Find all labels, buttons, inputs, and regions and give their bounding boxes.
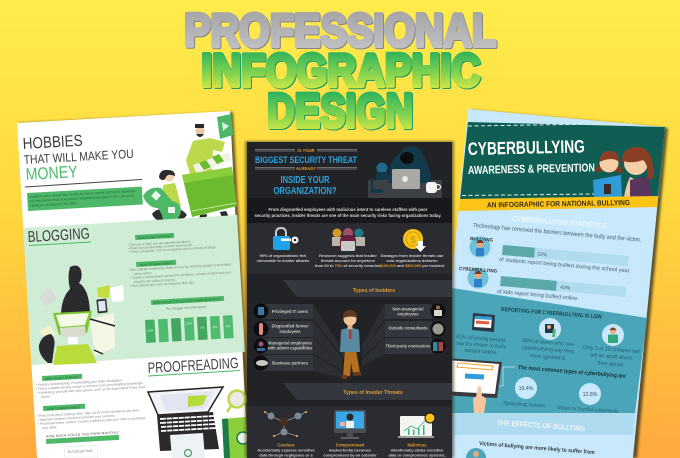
stat: mean comments <box>557 383 619 415</box>
left insider rows: with admin capabilities <box>267 346 313 350</box>
header heading: BIGGEST SECURITY THREAT <box>255 155 357 166</box>
stat: 1 in 10 children <box>582 324 640 369</box>
fact: lock icon: vulnerable to insider attacks <box>257 258 309 263</box>
section: three facts <box>247 223 452 274</box>
intro text box <box>27 187 143 211</box>
title line: Infographic: INFOGRAPHIC <box>202 45 481 97</box>
heading: cyberbullying: CYBERBULLYING <box>468 136 585 159</box>
left insider rows: employees <box>279 329 301 334</box>
stat: 1 in 10 children: Only 1 in 10 children will <box>582 345 640 355</box>
proofreading how to start: • Familiarize yourself with style guides, such as the Associated Press Style <box>37 385 146 395</box>
icon: child <box>466 448 486 458</box>
right insider rows: Outside consultants <box>388 326 428 330</box>
threat: compromised <box>323 410 377 458</box>
right insider rows: Non-managerial <box>393 306 423 312</box>
intro text box: HOBBIES ARE A GREAT WAY TO RELAX WHEN YOU'RE NOT BUSY WORKING. <box>29 189 136 199</box>
heading: hobbies: THAT WILL MAKE YOU <box>23 147 134 167</box>
intro text box: SERVE AS SECONDARY INCOME? <box>30 201 77 208</box>
effects intro: Victims of bullying are more likely to suffer from <box>479 441 595 456</box>
stat: 90% of teens <box>522 318 575 362</box>
blogging how to make money: • Run affiliate marketing. Make money by referring people to purchase <box>129 262 231 272</box>
threat: malicious: data or compromises systems, <box>388 452 446 458</box>
fact: hooded team icon: Research suggests that insider <box>319 253 377 258</box>
stat: 90% of teens: 90% of teens who see <box>522 338 574 348</box>
blogging how to make money: readers are willing to pay for. <box>134 278 176 284</box>
right insider rows <box>385 304 446 354</box>
heading: blogging: BLOGGING <box>27 226 90 246</box>
stat: cyberbullying 43%: CYBERBULLYING <box>459 266 497 275</box>
blogging how to start: HOW TO GET STARTED <box>138 234 173 240</box>
blogging how to start: • Focus on quality. You're competing with hundreds of blogs. <box>129 245 217 254</box>
stat: 81% young people <box>456 313 507 356</box>
subheading: awareness and prevention: AWARENESS & PREVENTION <box>468 162 595 177</box>
panel: insider threat infographic <box>245 141 454 458</box>
proofreading earnings block: $13.50 per hour <box>68 449 94 454</box>
illustration: blogger at laptop <box>39 266 124 365</box>
title line: Professional: PROFESSIONAL <box>184 4 496 56</box>
statistics heading: CYBERBULLYING STATISTICS <box>512 214 607 230</box>
stat: spreading rumors: 19.4% <box>519 386 534 392</box>
threat: careless: data through negligence or a <box>259 452 314 458</box>
illustration: two girls with phone <box>593 147 654 197</box>
common types heading: The most common types of cyberbullying are <box>518 365 627 380</box>
blogging earnings bar chart <box>145 296 234 343</box>
header heading: IS YOUR <box>297 148 315 153</box>
right insider rows: employees <box>397 312 419 316</box>
stat: spreading rumors: Spreading rumors <box>503 401 546 409</box>
threat: malicious <box>388 413 446 458</box>
proofreading how to start: HOW TO GET STARTED <box>45 375 80 381</box>
illustration: man with clapperboard <box>182 114 237 220</box>
proofreading how to start: • Practice proofreading. Proofreading your daily newspaper. <box>36 378 123 387</box>
illustration: laptop and magnifier <box>148 387 249 458</box>
stat: bullying 22%: of students report being bullied during the school year. <box>499 257 631 275</box>
fact: lock icon <box>257 228 309 263</box>
header banner <box>460 122 665 200</box>
proofreading how to start: • Find a suitable training course to enhance your proofreading knowledge. <box>36 381 144 391</box>
subtitle ribbon <box>458 196 658 211</box>
blogging how to start: • Choose a topic you are passionate about. <box>128 239 191 247</box>
blogging how to make money: • Run private ads such as cost-per-click ads. <box>130 280 195 288</box>
illustration: hacker at laptop <box>368 146 442 198</box>
fan connectors <box>313 304 385 378</box>
fact: coin icon: Damages from insider threats can <box>381 253 444 258</box>
header heading <box>255 148 357 197</box>
stat: cyberbullying 43%: of kids report being bullied online. <box>497 289 579 302</box>
proofreading how to make money: HOW TO MAKE MONEY <box>47 405 80 411</box>
stat: spreading rumors <box>503 377 546 409</box>
stat: bullying 22% <box>470 236 631 275</box>
title <box>184 4 497 139</box>
proofreading how to make money: • Proofread online content. Contact publishers with your offer to proofread <box>38 416 145 426</box>
stat: 90% of teens: have ignored it. <box>530 353 566 362</box>
fact: lock icon: 90% of organizations feel <box>260 253 306 258</box>
title line: Infographic: INFOGRAPHIC <box>201 44 480 96</box>
fact: hooded team icon: threats account for anywhere <box>321 258 376 263</box>
left insider rows: Business partners <box>272 360 309 366</box>
subtitle ribbon: AN INFOGRAPHIC FOR NATIONAL BULLYING <box>487 198 630 209</box>
fact: coin icon: $ <box>410 235 416 246</box>
stat: 81% young people: 81% of young people <box>456 334 506 344</box>
reporting heading: REPORTING FOR CYBERBULLYING IS LOW <box>501 307 603 321</box>
stat: 81% young people: people online. <box>464 348 498 356</box>
header heading: ALREADY <box>296 166 316 171</box>
proofreading how to make money: • Approach website owners to promote your services. <box>38 414 116 422</box>
section: statistics <box>459 214 642 302</box>
band: types of insiders: Types of Insiders <box>353 288 395 294</box>
fact: coin icon <box>380 229 445 268</box>
blogging earnings bar chart: 12% <box>186 321 192 326</box>
right insider rows: Third-party contractors <box>385 344 431 348</box>
section: effects of bullying <box>438 413 635 458</box>
proofreading earnings block: HOW MUCH COULD YOU EARN MONTHLY <box>46 430 120 438</box>
stat: cyberbullying 43%: 43% <box>560 285 571 292</box>
blogging earnings bar chart: 10% <box>147 329 154 333</box>
fact: hooded team icon: from 60 to 75% of security breaches <box>315 263 381 268</box>
blogging how to make money: HOW TO MAKE MONEY <box>140 261 173 267</box>
proofreading earnings block <box>46 430 120 458</box>
blogging how to make money: • Create a subscription service for members. Create content that your <box>130 270 232 280</box>
stat: bullying 22%: BULLYING <box>470 236 493 244</box>
stat: 1 in 10 children: their abuse. <box>597 360 625 369</box>
diagram: insider types <box>254 304 446 379</box>
blogging earnings bar chart: 9% <box>213 325 218 329</box>
heading: hobbies: MONEY <box>25 162 78 184</box>
title line: Design: DESIGN <box>267 85 413 138</box>
title line: Design: DESIGN <box>268 86 414 139</box>
threat: compromised: compromised by an outsider <box>323 452 377 458</box>
threat: compromised: Compromised <box>336 442 365 448</box>
section background: blogging <box>23 215 245 365</box>
intro text: From disgruntled employees with malicious intent to careless staffers with poor <box>268 207 428 213</box>
intro text box: DID YOU KNOW THAT IN ADDITION TO BEING ENJOYABLE, THEY CAN ALSO <box>29 193 135 203</box>
left insider rows: Managerial employees <box>268 340 313 346</box>
threat: careless: Accidentally exposes sensitive <box>257 448 315 452</box>
proofreading how to make money <box>37 404 145 430</box>
illustration: woman with game controller <box>143 170 187 228</box>
intro text: security practices, insider threats are one of the main security risks facing organizations today. <box>254 213 442 219</box>
proofreading how to make money: your skills. <box>42 425 58 430</box>
proofreading how to start: Guide. <box>41 394 51 399</box>
stat: mean comments: 12.8% <box>583 392 598 398</box>
section: proofreading heading: PROOFREADING <box>147 355 239 377</box>
threat: malicious: Malicious <box>407 442 427 448</box>
blogging earnings bar chart: 6% <box>226 324 231 328</box>
band: types of insider threats <box>283 383 452 400</box>
band: types of insiders <box>283 280 452 297</box>
heading: hobbies <box>22 133 142 187</box>
statistics intro: Technology has removed the barriers between the bully and the victim. <box>473 223 642 244</box>
proofreading how to make money: • Find some proof reading roles. Sign up for online freelancer job sites. <box>37 408 140 418</box>
blogging earnings bar chart: Pro blogger monthly report <box>166 305 206 311</box>
title line: Professional: PROFESSIONAL <box>185 5 497 57</box>
stat: mean comments: Mean or hurtful comments <box>557 405 619 415</box>
threat: compromised: Inadvertently becomes <box>329 448 371 452</box>
panel: hobbies infographic <box>17 111 252 458</box>
left insider rows: Disgruntled former <box>272 324 309 328</box>
threat: careless <box>257 411 315 458</box>
blogging earnings bar chart: 7% <box>200 326 205 330</box>
stat: 81% young people: say it's easier to bully <box>456 341 507 350</box>
proofreading how to start <box>36 374 146 399</box>
stat: bullying 22%: 22% <box>537 252 548 258</box>
header heading: ORGANIZATION? <box>274 186 336 197</box>
stat: cyberbullying 43% <box>459 266 627 302</box>
connector line <box>487 367 515 386</box>
effects heading: THE EFFECTS OF BULLYING <box>497 418 585 433</box>
header heading: INSIDE YOUR <box>280 175 330 186</box>
threat: careless: Careless <box>277 442 295 448</box>
section: reporting is low <box>440 288 647 415</box>
fact: hooded team icon <box>315 228 381 268</box>
blogging how to make money: items online. <box>134 271 153 276</box>
heading: hobbies: HOBBIES <box>22 133 83 153</box>
panel: cyberbullying infographic <box>435 109 668 458</box>
blogging earnings bar chart: HOW MUCH COULD YOU EARN MONTHLY <box>153 297 222 305</box>
threat: malicious: Intentionally steals sensitive <box>391 448 444 452</box>
tablet with search and hand <box>440 358 502 413</box>
blogging how to make money <box>129 260 232 288</box>
fact: coin icon: cost organizations between <box>386 258 438 263</box>
left insider rows: Privileged IT users <box>272 309 309 314</box>
blogging how to start: • Read successful blogs to learn what works. <box>128 243 193 250</box>
blogging how to start <box>128 233 217 254</box>
section: threat types <box>247 406 452 458</box>
band: types of insider threats: Types of Insider Threats <box>343 390 403 396</box>
stat: 90% of teens: cyberbullying say they <box>522 345 575 355</box>
left insider rows <box>254 304 313 371</box>
intro text <box>247 198 452 223</box>
stat: 1 in 10 children: tell an adult about <box>590 352 633 362</box>
fact: coin icon: $100,000 and $500,000 per incident <box>380 263 445 268</box>
illustration: central man <box>340 310 361 379</box>
